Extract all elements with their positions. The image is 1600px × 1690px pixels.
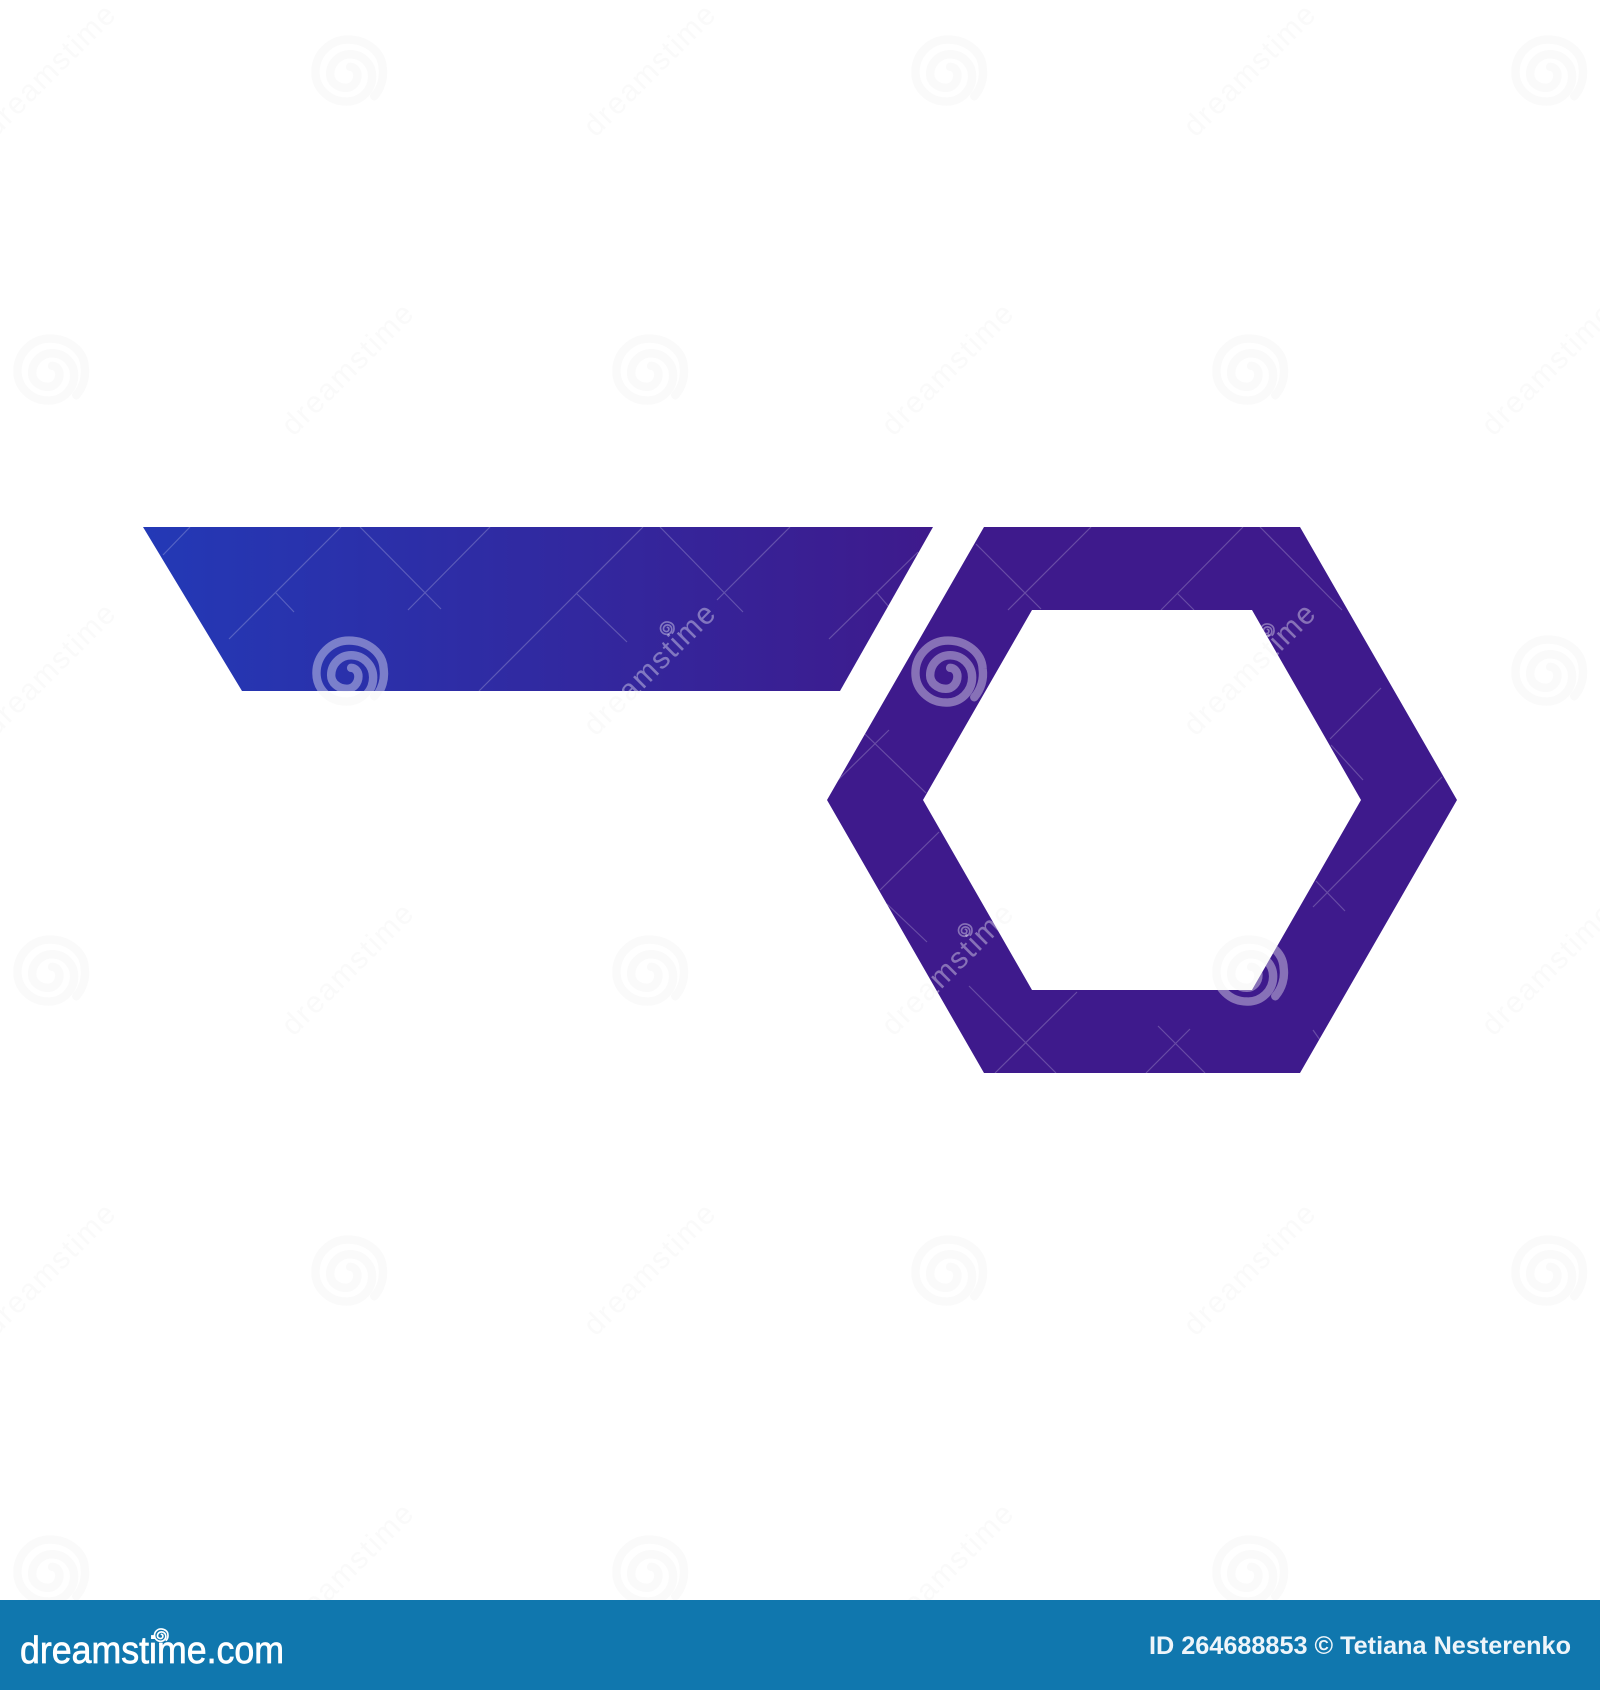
watermark over the shapes: dreamstime (577, 597, 722, 742)
watermark on white background: dreamstime (275, 297, 420, 442)
footer logo: dreamstime.com (20, 1630, 284, 1672)
watermark over the shapes: dreamstime (1177, 597, 1322, 742)
hexagon ring (827, 527, 1457, 1073)
watermark on white background: dreamstime (875, 897, 1020, 1042)
watermark on white background: dreamstime (875, 297, 1020, 442)
watermark on white background: dreamstime (577, 1197, 722, 1342)
watermark on white background: dreamstime (1177, 0, 1322, 143)
watermark on white background: dreamstime (875, 1497, 1020, 1642)
watermark on white background: dreamstime (275, 897, 420, 1042)
footer bar (0, 1600, 1600, 1690)
watermark on white background: dreamstime (275, 1497, 420, 1642)
watermark on white background: dreamstime (577, 0, 722, 143)
watermark on white background: dreamstime (1177, 1197, 1322, 1342)
watermark over the shapes (163, 527, 1442, 1073)
watermark on white background: dreamstime (577, 597, 722, 742)
banner: gradient trapezoid (143, 527, 933, 691)
watermark over the shapes: dreamstime (875, 897, 1020, 1042)
infographic canvas (0, 527, 1600, 1690)
watermark on white background: dreamstime (1177, 597, 1322, 742)
footer credit: ID 264688853 © Tetiana Nesterenko (1149, 1632, 1571, 1660)
